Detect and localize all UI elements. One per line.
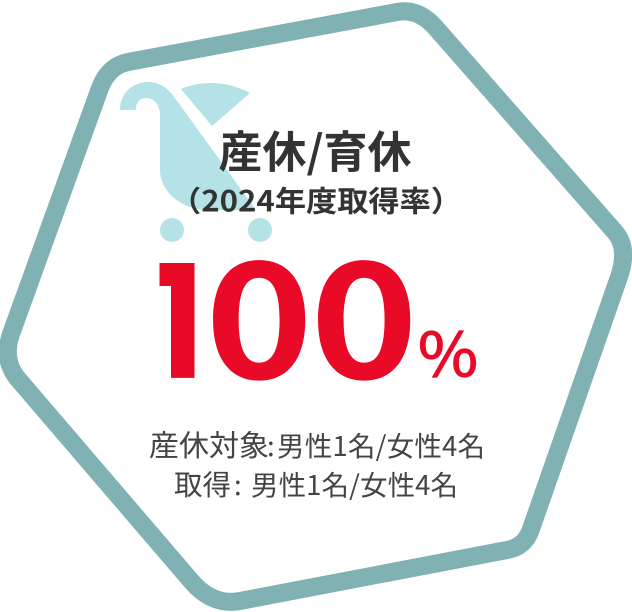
subtitle: （2024年度取得率） <box>170 178 462 220</box>
detail text line 2: : <box>234 463 242 503</box>
title: 産休/育休 <box>218 116 412 180</box>
detail text line 1: 男性1名/女性4名 <box>277 424 485 464</box>
detail text line 2: 取得 <box>174 463 231 504</box>
detail text line 2: 男性1名/女性4名 <box>251 463 458 503</box>
detail text line 1: : <box>267 424 275 464</box>
big number: 100%: 0 <box>205 197 313 424</box>
detail text line 1: 産休対象 <box>149 423 269 465</box>
icon: baby stroller <box>120 82 272 242</box>
big number: 100%: % <box>418 307 478 394</box>
detail text line 1 <box>149 423 485 465</box>
big number: 100%: 0 <box>310 197 418 424</box>
big number: 100%: 1 <box>135 193 229 425</box>
big number: 100% <box>160 260 476 381</box>
